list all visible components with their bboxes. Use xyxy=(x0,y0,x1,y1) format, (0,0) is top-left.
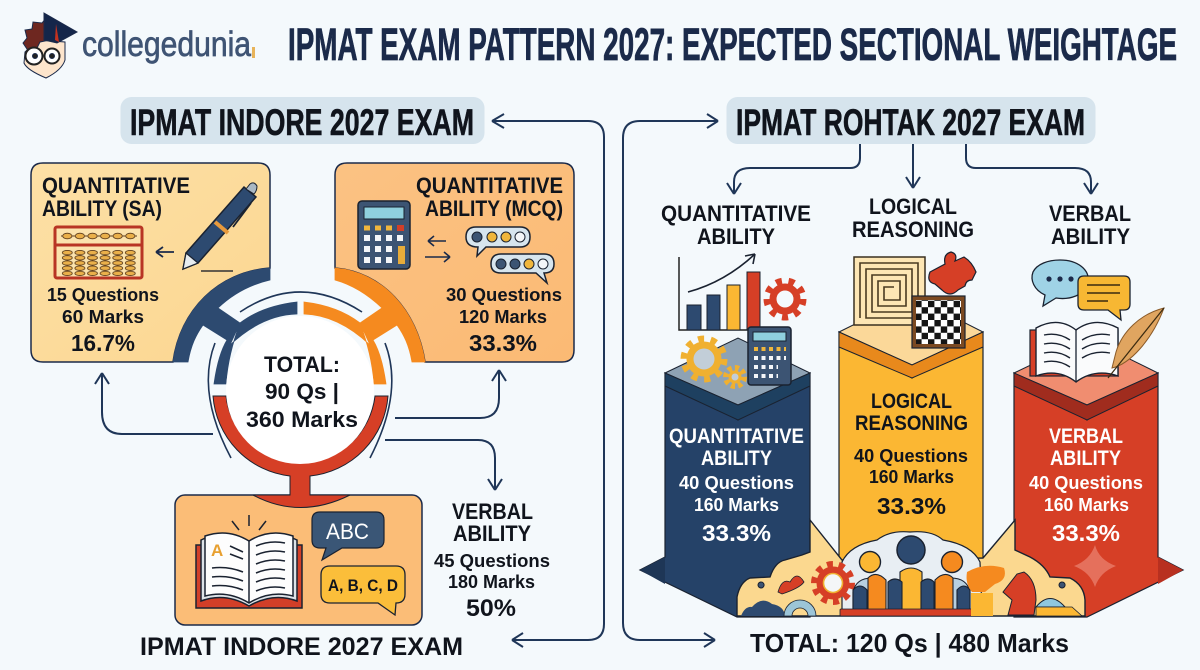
pillar stats: VERBAL xyxy=(1049,425,1123,448)
arrow: Rohtak to Verbal xyxy=(966,144,1098,194)
icon: option bubble top xyxy=(466,227,530,256)
navy segment xyxy=(173,268,297,384)
text block: Verbal Ability stats: 180 Marks xyxy=(448,572,535,592)
pillar: Quantitative Ability xyxy=(640,338,810,617)
decor: heart xyxy=(778,576,804,594)
pillar stats: ABILITY xyxy=(701,447,772,470)
text block: Verbal Ability stats: ABILITY xyxy=(453,521,531,546)
panel stats: 16.7% xyxy=(71,330,135,356)
icon: open book xyxy=(196,515,302,608)
pillar stats: 33.3% xyxy=(702,520,771,546)
decor: chess knight xyxy=(1003,572,1036,615)
arrow: Rohtak to Quantitative xyxy=(727,144,860,194)
panel heading xyxy=(416,173,563,221)
panel stats: 33.3% xyxy=(469,330,537,356)
arrow: Rohtak to Logical xyxy=(906,144,920,188)
heading: Verbal column: ABILITY xyxy=(1051,224,1130,249)
decor: yellow block xyxy=(971,593,993,616)
arrow: donut to Verbal stats xyxy=(385,440,502,490)
arrow: donut to SA panel xyxy=(95,373,213,434)
panel heading: QUANTITATIVE xyxy=(416,173,563,198)
red segment with stem xyxy=(213,396,388,508)
cream backdrop xyxy=(737,520,1085,616)
panel stats xyxy=(446,285,562,356)
pillar stats: QUANTITATIVE xyxy=(669,425,804,448)
pillar stats: 33.3% xyxy=(1052,520,1120,546)
team: people xyxy=(853,536,970,610)
heading: Logical column: REASONING xyxy=(852,217,974,242)
total text: TOTAL: xyxy=(264,352,340,377)
panel stats: 30 Questions xyxy=(446,285,562,305)
heading: Verbal column: VERBAL xyxy=(1049,201,1131,226)
thin outer arcs xyxy=(208,292,392,458)
decor: dots xyxy=(758,582,1065,588)
decor: dome base xyxy=(1036,607,1082,616)
chart: total donut xyxy=(173,268,425,508)
heading: Verbal column xyxy=(1049,201,1131,249)
pillar stats: 160 Marks xyxy=(1044,495,1129,515)
logo: collegedunia xyxy=(23,13,255,78)
heading: Quantitative column: ABILITY xyxy=(697,224,775,249)
icon: option bubble bottom xyxy=(491,254,554,283)
pillar stats: 40 Questions xyxy=(679,473,794,493)
illustration: team and symbols base xyxy=(737,520,1085,616)
pillar stats xyxy=(854,390,968,519)
icon: abacus xyxy=(55,227,142,278)
panel heading: ABILITY (MCQ) xyxy=(425,196,563,221)
panel stats: 60 Marks xyxy=(62,307,144,327)
heading: Logical column: LOGICAL xyxy=(869,194,957,219)
icon: pen xyxy=(183,183,257,271)
heading: IPMAT Indore pill: IPMAT INDORE 2027 EXAM xyxy=(130,102,474,143)
footer: Indore label: IPMAT INDORE 2027 EXAM xyxy=(140,633,463,661)
icon: student mascot xyxy=(23,13,77,78)
orange segment xyxy=(304,268,425,384)
white cloud xyxy=(842,532,982,610)
icon: ABC speech bubble: ABC xyxy=(326,519,369,544)
text block: Verbal Ability stats xyxy=(434,499,550,622)
text block: Verbal Ability stats: 45 Questions xyxy=(434,551,550,571)
decor: navy cloud xyxy=(741,601,785,616)
logo accent xyxy=(252,47,255,58)
illustration: maze, puzzle piece and chessboard xyxy=(854,252,976,348)
pillar stats: 33.3% xyxy=(877,493,946,519)
text block: Verbal Ability stats: 50% xyxy=(466,595,516,622)
panel heading: QUANTITATIVE xyxy=(42,173,190,198)
pillar stats xyxy=(1029,425,1143,546)
icon: calculator xyxy=(358,201,410,269)
icon: A B C D speech bubble: A, B, C, D xyxy=(328,576,398,595)
panel stats: 15 Questions xyxy=(47,285,159,305)
pillar stats: 160 Marks xyxy=(694,495,779,515)
pillar: Logical Reasoning xyxy=(839,296,983,562)
total text: 90 Qs | xyxy=(265,379,339,404)
heading: Quantitative column xyxy=(661,201,811,249)
pillar stats: 40 Questions xyxy=(854,446,968,466)
text block: Verbal Ability stats: VERBAL xyxy=(452,499,533,524)
arrow: Rohtak footer to Rohtak header xyxy=(623,114,718,647)
decor: blue gear xyxy=(784,600,816,616)
total text: 360 Marks xyxy=(246,407,358,432)
panel: Quantitative Ability SA xyxy=(31,163,270,362)
arrows: exchange xyxy=(425,236,450,262)
illustration: speech bubbles, book and quill xyxy=(1030,260,1164,382)
heading: IPMAT Rohtak pill xyxy=(726,97,1096,144)
arrow: pen to abacus xyxy=(156,247,174,257)
pillar: Verbal Ability xyxy=(1014,338,1183,617)
footer: Rohtak total: TOTAL: 120 Qs | 480 Marks xyxy=(750,628,1069,658)
icon: open book: A xyxy=(211,541,223,560)
decor: orange shape xyxy=(967,566,1005,592)
decor: red table bar xyxy=(840,609,983,616)
pillar stats: REASONING xyxy=(855,412,968,435)
panel heading: ABILITY (SA) xyxy=(42,196,162,221)
heading: Logical column xyxy=(852,194,974,242)
panel stats xyxy=(47,285,159,356)
centre disc xyxy=(226,316,374,464)
decor: dome xyxy=(1036,598,1065,607)
arrow: donut to MCQ panel xyxy=(395,370,506,418)
pillar stats: 160 Marks xyxy=(869,467,954,487)
pillar stats: ABILITY xyxy=(1050,447,1121,470)
icon: sparkle xyxy=(1074,545,1116,587)
icon: ABC speech bubble xyxy=(312,512,384,560)
logo wordmark: collegedunia xyxy=(82,25,251,64)
pillar stats: 40 Questions xyxy=(1029,473,1143,493)
arrow: Indore header to Indore footer xyxy=(492,114,604,647)
heading: Quantitative column: QUANTITATIVE xyxy=(661,201,811,226)
pillar stats: LOGICAL xyxy=(871,390,952,413)
panel stats: 120 Marks xyxy=(459,307,547,327)
illustration: bar chart with gears and calculator xyxy=(679,254,803,386)
heading: IPMAT Indore pill xyxy=(120,97,484,144)
total text xyxy=(246,352,358,432)
icon: A B C D speech bubble xyxy=(321,566,405,615)
pillar stats xyxy=(669,425,804,546)
red gear xyxy=(814,564,852,602)
panel: Verbal Ability card xyxy=(175,495,422,625)
panel heading xyxy=(42,173,190,221)
panel: Quantitative Ability MCQ xyxy=(335,163,574,362)
